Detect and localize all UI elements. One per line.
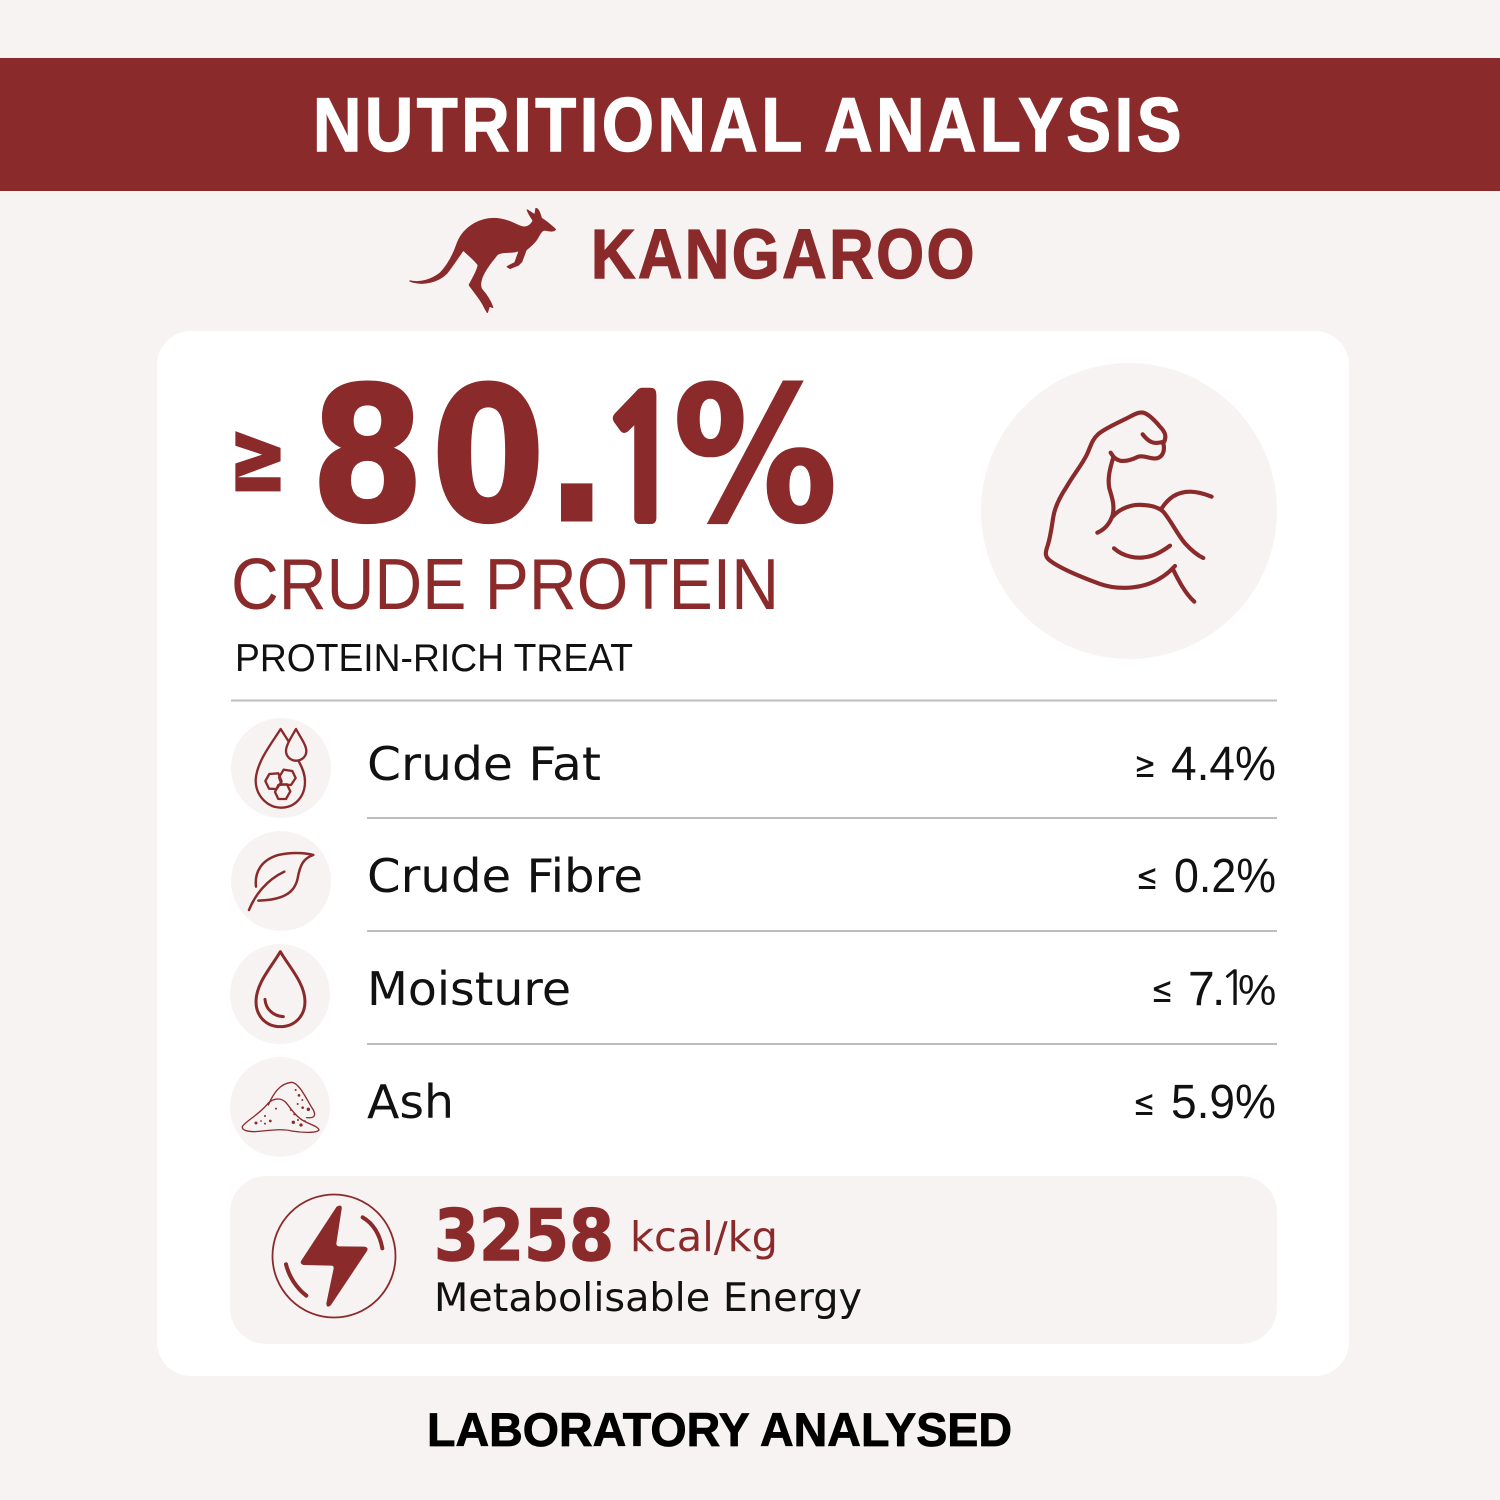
- value: %: [1238, 967, 1276, 1015]
- row: crude fibre: [231, 831, 1276, 931]
- energy value: 3258: [434, 1195, 614, 1277]
- value: ≤: [1136, 857, 1158, 898]
- value: ≥: [1134, 745, 1156, 786]
- footer: laboratory analysed: LABORATORY ANALYSED: [427, 1403, 1012, 1456]
- title: NUTRITIONAL ANALYSIS: [313, 83, 1185, 168]
- icon: water drop: [230, 944, 330, 1044]
- value: 0.2%: [1174, 850, 1276, 903]
- protein value: 1: [597, 377, 687, 545]
- panel: metabolisable energy: [230, 1176, 1277, 1344]
- icon: fat droplets: [231, 718, 331, 818]
- icon: flexed arm: [981, 363, 1277, 659]
- energy label: Metabolisable Energy: [434, 1276, 862, 1321]
- value: ≤: [1133, 1083, 1155, 1124]
- value: 5.9%: [1171, 1076, 1276, 1129]
- value: ≤: [1151, 970, 1173, 1011]
- value: [1151, 963, 1276, 1016]
- headline stat: crude protein: [229, 348, 837, 680]
- protein value: 80.: [311, 348, 608, 565]
- row: crude fat: [231, 718, 1276, 818]
- icon: kangaroo: [410, 209, 555, 312]
- value: 7.: [1188, 963, 1225, 1016]
- value: 4.4%: [1171, 738, 1276, 791]
- icon: leaf: [231, 831, 331, 931]
- greater-or-equal symbol: ≥: [229, 399, 287, 513]
- row: moisture: [230, 944, 1276, 1044]
- energy unit: kcal/kg: [630, 1213, 778, 1261]
- label: Ash: [367, 1075, 454, 1129]
- protein note: PROTEIN-RICH TREAT: [235, 637, 633, 680]
- row: ash: [230, 1057, 1276, 1157]
- protein label: CRUDE PROTEIN: [231, 545, 779, 625]
- label: Moisture: [367, 962, 571, 1016]
- label: Crude Fibre: [367, 849, 643, 903]
- value: 1: [1219, 964, 1248, 1012]
- protein value: %: [673, 348, 837, 565]
- icon: lightning bolt: [272, 1194, 396, 1318]
- icon: ash pile: [230, 1057, 330, 1157]
- title banner: [0, 58, 1500, 191]
- subtitle: kangaroo: KANGAROO: [591, 215, 977, 293]
- label: Crude Fat: [367, 737, 601, 791]
- value: [1136, 850, 1276, 903]
- panel: nutrition card: [157, 331, 1349, 1376]
